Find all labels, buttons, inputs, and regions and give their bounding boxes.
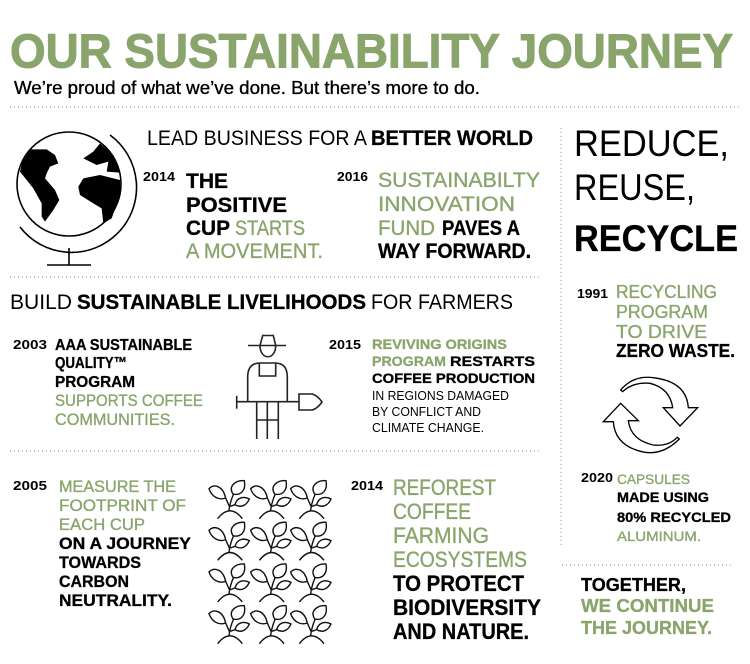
text: 2015 reviving origins: BY CONFLICT AND bbox=[372, 404, 481, 419]
text: 2014 reforest: COFFEE bbox=[393, 499, 471, 524]
text: 2005 measure footprint: TOWARDS bbox=[59, 553, 141, 572]
text: 2003 AAA program: QUALITY™ bbox=[55, 355, 127, 372]
text: 1991 recycling program: ZERO WASTE. bbox=[616, 341, 735, 361]
text: 2014 reforest bbox=[351, 475, 541, 644]
text: 2014 reforest: 2014 bbox=[351, 478, 384, 493]
callout: together: TOGETHER, bbox=[581, 575, 686, 595]
text: 2015 reviving origins: REVIVING ORIGINS bbox=[372, 336, 507, 352]
heading: reduce reuse recycle: RECYCLE bbox=[574, 218, 738, 259]
text: 2020 capsules: 80% RECYCLED bbox=[617, 509, 731, 525]
heading: reduce reuse recycle: REDUCE, bbox=[574, 123, 729, 164]
text: 2003 AAA program: COMMUNITIES. bbox=[55, 410, 175, 429]
text: 2020 capsules bbox=[581, 470, 731, 544]
text: 2020 capsules: 2020 bbox=[581, 470, 613, 485]
panel: footprint and reforestation bbox=[13, 475, 541, 644]
text: 1991 recycling program: PROGRAM bbox=[616, 302, 708, 322]
text: 1991 recycling program bbox=[577, 282, 735, 361]
text: 1991 recycling program: RECYCLING bbox=[616, 282, 717, 302]
text: 2020 capsules: ALUMINUM. bbox=[617, 528, 701, 544]
text: 2014 reforest: BIODIVERSITY bbox=[393, 595, 541, 620]
heading: sustainable livelihoods: FOR FARMERS bbox=[371, 291, 513, 314]
callout: together bbox=[581, 575, 714, 638]
title: OUR SUSTAINABILITY JOURNEY bbox=[10, 26, 733, 78]
heading: sustainable livelihoods bbox=[10, 291, 513, 314]
text: 2014 reforest: TO PROTECT bbox=[393, 571, 525, 596]
text: 2003 AAA program: PROGRAM bbox=[55, 374, 135, 391]
panel: reduce reuse recycle bbox=[574, 123, 738, 638]
heading: sustainable livelihoods: SUSTAINABLE LIVELIHOODS bbox=[77, 291, 366, 314]
text: 2005 measure footprint: FOOTPRINT OF bbox=[59, 496, 186, 515]
icon: grid of seedlings bbox=[209, 481, 331, 644]
text: 2015 reviving origins: PROGRAM bbox=[372, 353, 446, 369]
text: 2014 positive cup: CUP bbox=[186, 217, 230, 240]
heading: reduce reuse recycle bbox=[574, 123, 738, 259]
text: 2014 positive cup: THE bbox=[186, 170, 228, 193]
text: 2015 reviving origins: RESTARTS bbox=[450, 353, 535, 369]
text: 2014 reforest: REFOREST bbox=[393, 475, 496, 500]
text: 2015 reviving origins bbox=[329, 336, 535, 435]
panel: farmers bbox=[10, 291, 535, 439]
text: 2014 positive cup: STARTS bbox=[235, 217, 305, 240]
callout: together: WE CONTINUE bbox=[581, 596, 714, 616]
text: 2014 reforest: FARMING bbox=[393, 523, 489, 548]
text: 2015 reviving origins: 2015 bbox=[329, 337, 361, 352]
text: 2003 AAA program: SUPPORTS COFFEE bbox=[55, 391, 203, 410]
text: 2014 reforest: AND NATURE. bbox=[393, 619, 529, 644]
text: 2020 capsules: CAPSULES bbox=[617, 471, 690, 487]
text: 2005 measure footprint: NEUTRALITY. bbox=[59, 591, 172, 610]
text: 2005 measure footprint: EACH CUP bbox=[59, 515, 145, 534]
heading: lead business bbox=[147, 127, 533, 150]
panel: lead business bbox=[17, 127, 540, 265]
heading: sustainable livelihoods: BUILD bbox=[10, 291, 72, 314]
text: 2020 capsules: MADE USING bbox=[617, 489, 709, 505]
text: 2003 AAA program bbox=[13, 337, 203, 429]
text: 2016 innovation fund bbox=[337, 169, 540, 263]
text: 2016 innovation fund: WAY FORWARD. bbox=[378, 240, 531, 263]
text: 2014 positive cup: 2014 bbox=[143, 169, 176, 184]
text: 2014 positive cup: A MOVEMENT. bbox=[186, 240, 323, 263]
icon: globe bbox=[17, 132, 137, 265]
text: 2015 reviving origins: COFFEE PRODUCTION bbox=[372, 370, 535, 386]
text: 2016 innovation fund: INNOVATION bbox=[378, 193, 515, 216]
heading: lead business: BETTER WORLD bbox=[371, 127, 533, 150]
text: 2014 reforest: ECOSYSTEMS bbox=[393, 547, 527, 572]
icon: recycle arrows bbox=[603, 377, 698, 453]
text: 2005 measure footprint: 2005 bbox=[13, 478, 47, 493]
text: 2005 measure footprint: ON A JOURNEY bbox=[59, 534, 192, 553]
text: 2003 AAA program: 2003 bbox=[13, 337, 47, 352]
text: 2014 positive cup bbox=[143, 169, 323, 263]
text: 2016 innovation fund: PAVES A bbox=[442, 217, 520, 240]
text: 2005 measure footprint: CARBON bbox=[59, 572, 129, 591]
icon: farmer with shovel bbox=[237, 336, 322, 439]
heading: reduce reuse recycle: REUSE, bbox=[574, 167, 695, 208]
callout: together: THE JOURNEY. bbox=[581, 618, 712, 638]
text: 2016 innovation fund: FUND bbox=[378, 217, 435, 240]
text: 1991 recycling program: 1991 bbox=[577, 286, 608, 301]
text: 2014 positive cup: POSITIVE bbox=[186, 194, 287, 217]
text: 1991 recycling program: TO DRIVE bbox=[616, 322, 707, 342]
text: 2015 reviving origins: CLIMATE CHANGE. bbox=[372, 420, 484, 435]
text: 2015 reviving origins: IN REGIONS DAMAGED bbox=[372, 388, 509, 403]
text: 2003 AAA program: AAA SUSTAINABLE bbox=[55, 337, 192, 354]
subtitle: We’re proud of what we’ve done. But there’s more to do. bbox=[14, 78, 480, 98]
text: 2016 innovation fund: 2016 bbox=[337, 169, 368, 184]
heading: lead business: LEAD BUSINESS FOR A bbox=[147, 127, 367, 150]
text: 2005 measure footprint bbox=[13, 477, 192, 610]
text: 2016 innovation fund: SUSTAINABILTY bbox=[378, 169, 540, 192]
text: 2005 measure footprint: MEASURE THE bbox=[59, 477, 176, 496]
